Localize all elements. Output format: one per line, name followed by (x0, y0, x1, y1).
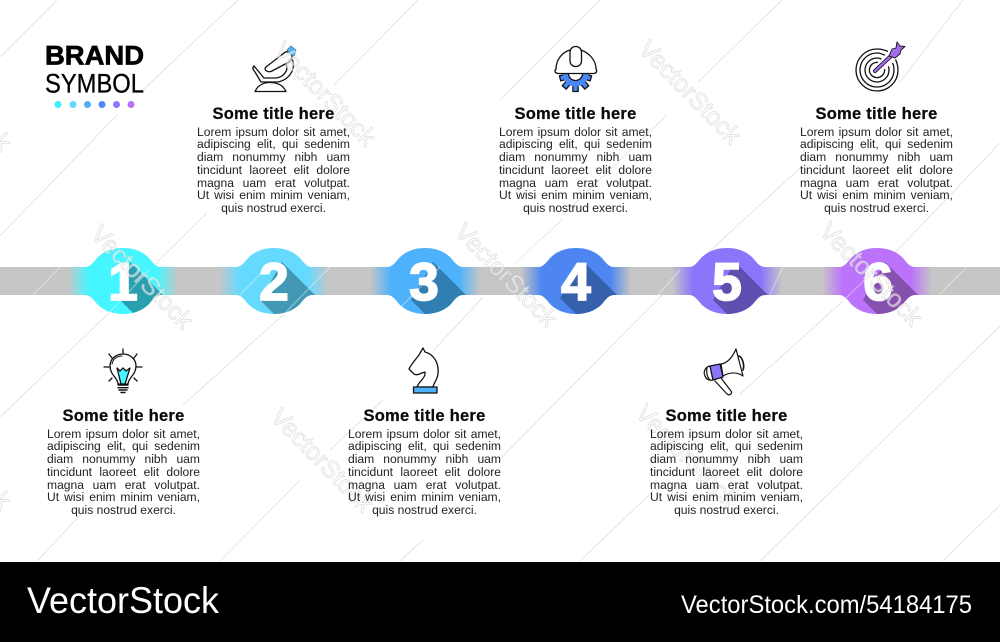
step 5 node (674, 248, 780, 314)
text block: step 3: magna uam erat volutpat. (348, 478, 501, 492)
text block: step 1: quis nostrud exerci. (71, 503, 176, 517)
text block: step 5: magna uam erat volutpat. (650, 478, 803, 492)
text block: step 4: Some title here (514, 105, 637, 123)
icon: hard hat and gear (555, 46, 597, 92)
text block: step 4: magna uam erat volutpat. (499, 176, 652, 190)
text block: step 2 (197, 105, 350, 215)
text block: step 3: Ut wisi enim minim veniam, (348, 490, 501, 504)
text block: step 5 (650, 407, 803, 517)
step 4 node: 4 (561, 253, 591, 312)
text block: step 5: quis nostrud exerci. (674, 503, 779, 517)
watermark text: VectorStock (265, 403, 379, 518)
icon: megaphone (704, 349, 744, 395)
text block: step 6: Lorem ipsum dolor sit amet, (800, 124, 953, 138)
icon: chess knight (409, 348, 438, 393)
text block: step 3: quis nostrud exerci. (372, 503, 477, 517)
text block: step 4 (499, 105, 652, 215)
text block: step 3: tincidunt laoreet elit dolore (348, 465, 501, 479)
watermark text (0, 30, 1000, 518)
text block: step 4: Lorem ipsum dolor sit amet, (499, 124, 652, 138)
watermark text: VectorStock (630, 399, 744, 514)
text block: step 4: Ut wisi enim minim veniam, (499, 188, 652, 202)
footer band: VectorStock.com/54184175 (681, 591, 972, 619)
text block: step 3: adipiscing elit, qui sedenim (348, 439, 501, 453)
text block: step 2: Ut wisi enim minim veniam, (197, 188, 350, 202)
text block: step 2: magna uam erat volutpat. (197, 176, 350, 190)
text block: step 2: adipiscing elit, qui sedenim (197, 137, 350, 151)
text block: step 6: Some title here (815, 105, 938, 123)
text block: step 5: diam nonummy nibh uam (650, 452, 803, 466)
text block: step 5: adipiscing elit, qui sedenim (650, 439, 803, 453)
text block: step 2: diam nonummy nibh uam (197, 150, 350, 164)
icon: target with arrow (856, 42, 905, 91)
step 5 node: 5 (712, 253, 742, 312)
watermark text: VectorStock (449, 218, 563, 333)
text block: step 1: Ut wisi enim minim veniam, (47, 490, 200, 504)
watermark text: VectorStock (814, 217, 928, 332)
text block: step 4: adipiscing elit, qui sedenim (499, 137, 652, 151)
step 1 node (70, 248, 176, 314)
step 6 node (824, 248, 930, 314)
text block: step 6: magna uam erat volutpat. (800, 176, 953, 190)
text block: step 1: Lorem ipsum dolor sit amet, (47, 426, 200, 440)
text block: step 3: Lorem ipsum dolor sit amet, (348, 426, 501, 440)
step 1 node: 1 (108, 253, 138, 312)
text block: step 6: Ut wisi enim minim veniam, (800, 188, 953, 202)
text block: step 6: adipiscing elit, qui sedenim (800, 137, 953, 151)
text block: step 1: magna uam erat volutpat. (47, 478, 200, 492)
text block: step 6: tincidunt laoreet elit dolore (800, 163, 953, 177)
text block: step 1: adipiscing elit, qui sedenim (47, 439, 200, 453)
text block: step 3: diam nonummy nibh uam (348, 452, 501, 466)
text block: step 1: diam nonummy nibh uam (47, 452, 200, 466)
text block: step 6 (800, 105, 953, 215)
watermark text: VectorStock (268, 37, 382, 152)
step 6 node: 6 (863, 253, 893, 312)
text block: step 4: quis nostrud exerci. (523, 201, 628, 215)
icon: microscope (253, 46, 296, 92)
text block: step 2: Some title here (212, 105, 335, 123)
text block: step 1 (47, 407, 200, 517)
brand logo (45, 40, 144, 108)
text block: step 5: Some title here (665, 407, 788, 425)
text block: step 2: quis nostrud exerci. (221, 201, 326, 215)
text block: step 2: Lorem ipsum dolor sit amet, (197, 124, 350, 138)
text block: step 5: Ut wisi enim minim veniam, (650, 490, 803, 504)
watermark text: VectorStock (633, 35, 747, 150)
footer band: VectorStock (27, 580, 219, 621)
brand logo: SYMBOL (45, 68, 144, 98)
text block: step 4: tincidunt laoreet elit dolore (499, 163, 652, 177)
step 3 node (372, 248, 478, 314)
brand logo: BRAND (45, 40, 144, 70)
text block: step 6: diam nonummy nibh uam (800, 150, 953, 164)
text block: step 5: Lorem ipsum dolor sit amet, (650, 426, 803, 440)
text block: step 3 (348, 407, 501, 517)
watermark text: VectorStock (85, 220, 199, 335)
step 4 node (522, 248, 630, 314)
text block: step 3: Some title here (363, 407, 486, 425)
step 3 node: 3 (409, 253, 439, 312)
timeline bar (0, 267, 1000, 295)
text block: step 4: diam nonummy nibh uam (499, 150, 652, 164)
footer band (0, 562, 1000, 642)
step 2 node: 2 (259, 253, 289, 312)
text block: step 2: tincidunt laoreet elit dolore (197, 163, 350, 177)
icon: light bulb (104, 349, 142, 392)
step 2 node (221, 248, 327, 314)
text block: step 1: tincidunt laoreet elit dolore (47, 465, 200, 479)
text block: step 6: quis nostrud exerci. (824, 201, 929, 215)
text block: step 5: tincidunt laoreet elit dolore (650, 465, 803, 479)
text block: step 1: Some title here (62, 407, 185, 425)
